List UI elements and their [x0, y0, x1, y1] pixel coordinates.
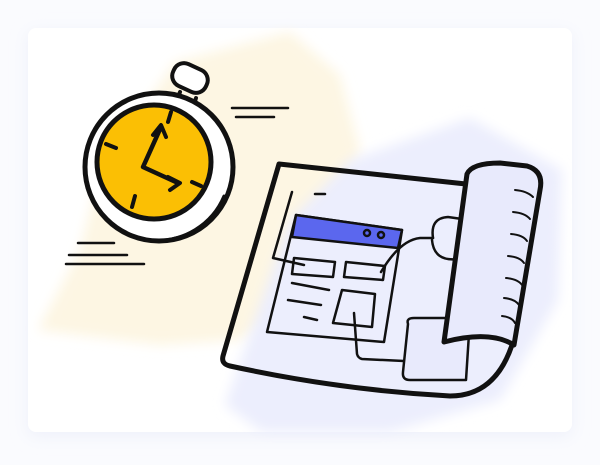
background splash: yellow	[38, 32, 360, 345]
stopwatch	[85, 60, 233, 241]
roll	[444, 163, 541, 345]
icon: knob	[169, 60, 211, 112]
icon: face	[97, 105, 211, 219]
clock ticks and hands	[106, 112, 201, 207]
speed lines	[66, 108, 288, 264]
background splash: lavender	[225, 118, 562, 432]
blueprint	[223, 163, 541, 396]
paper outline	[223, 164, 512, 396]
wireframe window	[267, 192, 470, 380]
icon: outer ring	[85, 93, 233, 241]
card	[28, 28, 572, 436]
